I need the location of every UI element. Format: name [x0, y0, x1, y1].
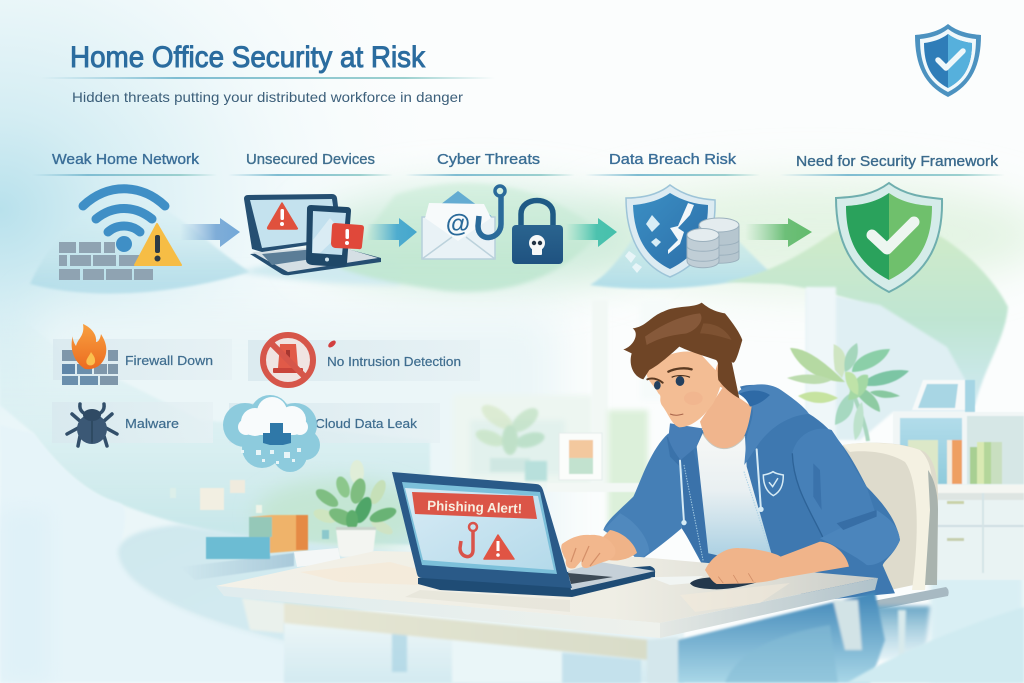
- step: unsecured devices: Unsecured Devices: [246, 151, 375, 168]
- icon: alert hook and warning: [460, 523, 514, 559]
- panel: firewall down: Firewall Down: [125, 353, 213, 368]
- chair: [843, 443, 949, 665]
- t-shirt: [697, 433, 773, 560]
- step: cyber threats: [405, 151, 575, 264]
- hood: [738, 384, 809, 465]
- panel: malware: Malware: [125, 416, 179, 431]
- mouse and right hand: [650, 542, 849, 589]
- panel: firewall down: [53, 324, 232, 385]
- desk: [216, 551, 1024, 683]
- desk top: [216, 551, 878, 623]
- wall frame: [559, 433, 602, 480]
- arrow 3: [566, 218, 617, 247]
- arrow 4: [745, 218, 812, 247]
- shelf: [180, 553, 294, 580]
- left sleeve: [603, 433, 690, 562]
- step: unsecured devices: [228, 151, 393, 275]
- hair: [623, 303, 742, 398]
- face: [647, 352, 722, 427]
- step: data breach risk: Data Breach Risk: [609, 151, 737, 168]
- step: data breach risk: [585, 151, 760, 277]
- right green shape: [725, 215, 1008, 405]
- icon: phishing envelope with hook: @: [446, 210, 470, 238]
- background plant left: [474, 400, 546, 472]
- legs under desk: [242, 592, 885, 683]
- panel: cloud data leak: Cloud Data Leak: [315, 416, 418, 431]
- laptop screen: [392, 472, 572, 588]
- envelope blob: [340, 183, 600, 292]
- panel: malware: [52, 402, 213, 446]
- panel: no intrusion detection: [248, 335, 480, 385]
- icon: phishing envelope with hook: [422, 186, 505, 259]
- icon: leaking cloud: [223, 395, 320, 472]
- step: weak home network: Weak Home Network: [52, 151, 200, 168]
- under desk: [284, 610, 684, 683]
- panel: no intrusion detection: No Intrusion Detection: [327, 354, 461, 369]
- title: Home Office Security at Risk: [70, 41, 426, 74]
- icon: padlock with skull: [512, 200, 563, 264]
- potted plant: [312, 460, 398, 557]
- wifi blob: [30, 195, 250, 294]
- laptop: [392, 472, 655, 597]
- panel: cloud data leak: [223, 395, 440, 472]
- icon: bug: [67, 404, 117, 446]
- floor swoosh: [847, 607, 1024, 683]
- left hand on keyboard: [561, 530, 637, 569]
- step: weak home network: [32, 151, 217, 280]
- icon: burning wall: [62, 324, 118, 385]
- icon: shield logo: [915, 24, 981, 97]
- arrow 2: [367, 218, 417, 247]
- icon: cracked shield with database: [625, 185, 739, 277]
- background plant right: [787, 343, 909, 441]
- torso: [670, 385, 900, 600]
- icon: laptop and tablet with alerts: [244, 194, 381, 275]
- room background: [453, 287, 1024, 580]
- hoodie shield logo: [763, 472, 783, 496]
- step: cyber threats: Cyber Threats: [437, 151, 540, 168]
- icon: wifi with brick wall and warning: [59, 189, 181, 280]
- lower left: [40, 310, 560, 610]
- drawstrings and zip: [680, 449, 761, 523]
- eyes and brows: [647, 379, 663, 383]
- bottom right: [930, 575, 1024, 683]
- neck: [700, 387, 752, 452]
- step: need for security framework: Need for Security Framework: [796, 153, 999, 170]
- stacked boxes: [206, 515, 308, 559]
- step: need for security framework: [780, 153, 1005, 292]
- desk items: boxes and plant: [170, 460, 398, 580]
- sleeve shape: [792, 429, 877, 538]
- background shelf right: [893, 380, 1024, 580]
- laptop base: [418, 566, 655, 597]
- arrow 1: [180, 218, 240, 247]
- laptop: Phishing Alert!: [427, 498, 522, 516]
- person in hoodie: [603, 303, 900, 600]
- phishing banner: [412, 492, 537, 519]
- shield blob: [590, 195, 770, 289]
- icon: prohibited siren: [263, 335, 337, 385]
- icon: green shield with check: [836, 183, 942, 292]
- subtitle: Hidden threats putting your distributed workforce in danger: [72, 89, 463, 105]
- window panel right: [806, 290, 968, 440]
- ear: [715, 360, 731, 388]
